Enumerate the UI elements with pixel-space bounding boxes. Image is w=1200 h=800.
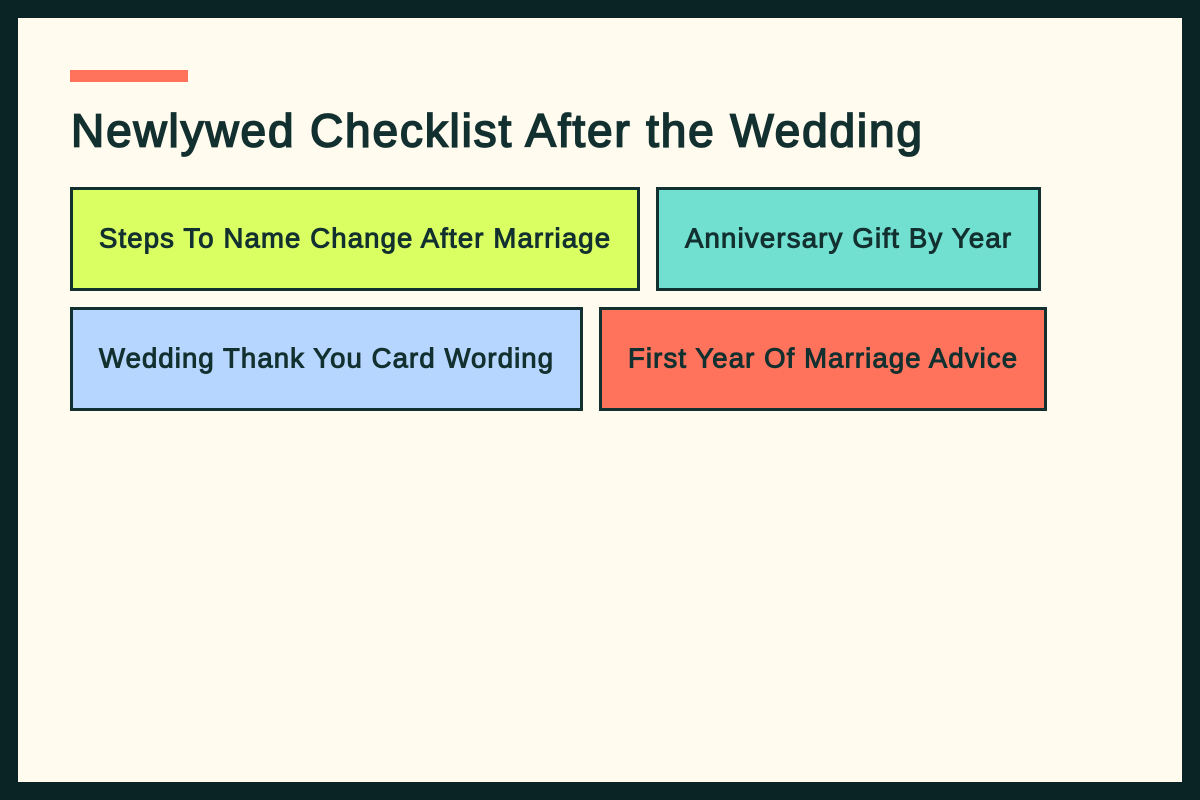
card: first year advice	[599, 307, 1047, 411]
label: first year advice: First Year Of Marriage Advice	[628, 342, 1017, 374]
label: thank you wording: Wedding Thank You Card Wording	[99, 342, 553, 374]
card: thank you wording	[70, 307, 583, 411]
label: steps to name change: Steps To Name Change After Marriage	[99, 222, 610, 254]
title: Newlywed Checklist After the Wedding	[71, 104, 922, 156]
card: anniversary gift	[656, 187, 1041, 291]
accent bar	[70, 70, 188, 82]
label: anniversary gift: Anniversary Gift By Year	[685, 222, 1011, 254]
card: steps to name change	[70, 187, 640, 291]
